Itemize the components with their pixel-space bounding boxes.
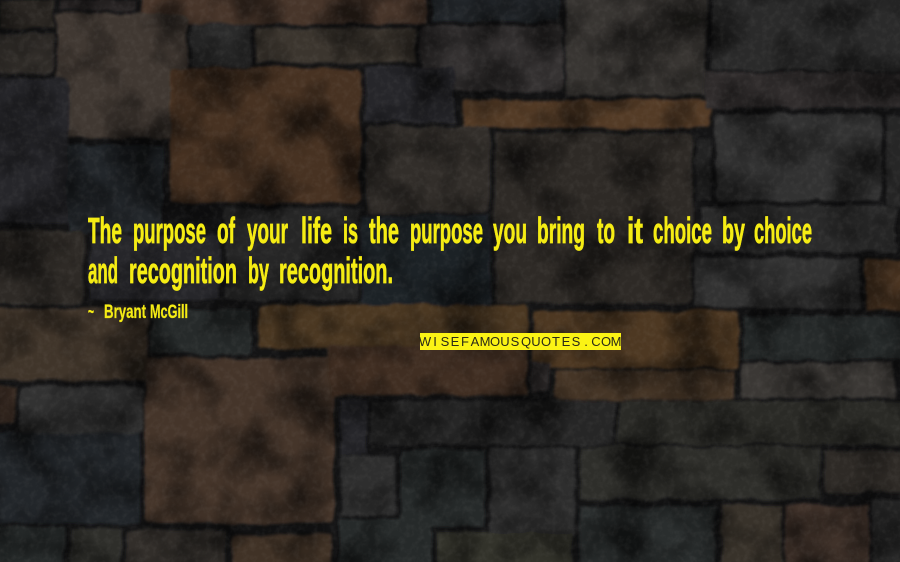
quote text: purpose [410,210,483,251]
quote text [88,210,812,291]
quote text: and [88,250,118,291]
quote text: is [343,210,358,251]
quote text: life [301,210,332,251]
logo: wisefamousquotes badge: WISEFAMOUSQUOTES.COM [419,334,621,349]
quote text: recognition [129,250,237,291]
author attribution: ~ [88,302,94,323]
author attribution [88,302,188,323]
author attribution: McGill [150,302,188,323]
quote text: bring [537,210,585,251]
quote text: choice [653,210,712,251]
quote text: to [597,210,615,251]
quote text: the [369,210,399,251]
quote text: it [627,210,643,251]
quote text: by [248,250,269,291]
quote text: your [247,210,288,251]
author attribution: Bryant [104,302,146,323]
quote text: by [722,210,745,251]
quote text: you [493,210,527,251]
quote text: of [217,210,236,251]
quote text: The [88,210,122,251]
quote text: purpose [133,210,206,251]
quote text: choice [754,210,812,251]
quote text: recognition. [279,250,393,291]
